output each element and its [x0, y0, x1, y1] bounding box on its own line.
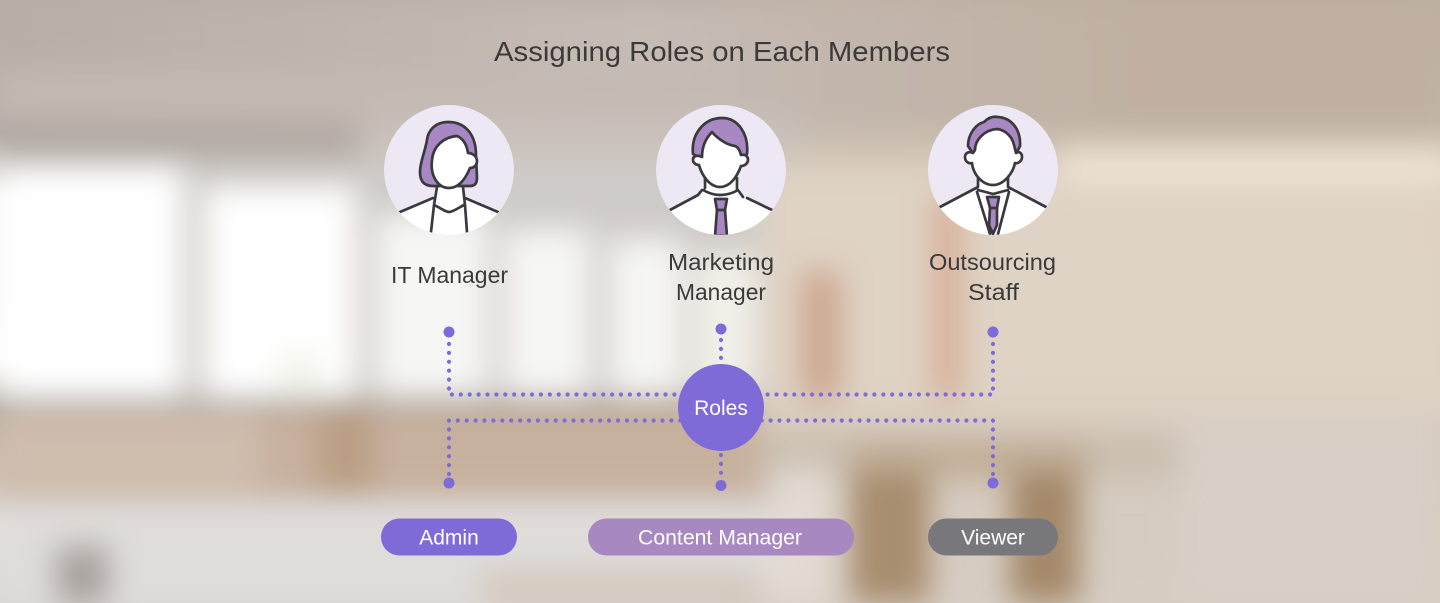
- label: Outsourcing Staff: Staff: [968, 279, 1020, 305]
- pill: Admin: Admin: [419, 526, 479, 550]
- roles hub: Roles: [694, 397, 748, 420]
- dotted connector lines: [449, 340, 993, 476]
- pill: Content Manager: [588, 518, 854, 556]
- roles hub: [678, 364, 764, 451]
- label: Marketing Manager: Manager: [676, 279, 766, 305]
- label: Marketing Manager: [668, 249, 774, 305]
- label: IT Manager: IT Manager: [391, 262, 508, 288]
- avatar: Outsourcing Staff: [928, 105, 1058, 240]
- label: Outsourcing Staff: Outsourcing: [929, 249, 1056, 275]
- avatar: IT Manager: [384, 105, 514, 240]
- pill: Viewer: Viewer: [961, 526, 1025, 550]
- pill: Content Manager: Content Manager: [638, 526, 802, 550]
- label: Outsourcing Staff: [929, 249, 1056, 305]
- avatar: Marketing Manager: [656, 105, 786, 240]
- title: Assigning Roles on Each Members: [494, 36, 950, 67]
- label: Marketing Manager: Marketing: [668, 249, 774, 275]
- pill: Admin: [381, 518, 517, 556]
- pill: Viewer: [928, 518, 1058, 556]
- endpoint dots: [444, 324, 998, 491]
